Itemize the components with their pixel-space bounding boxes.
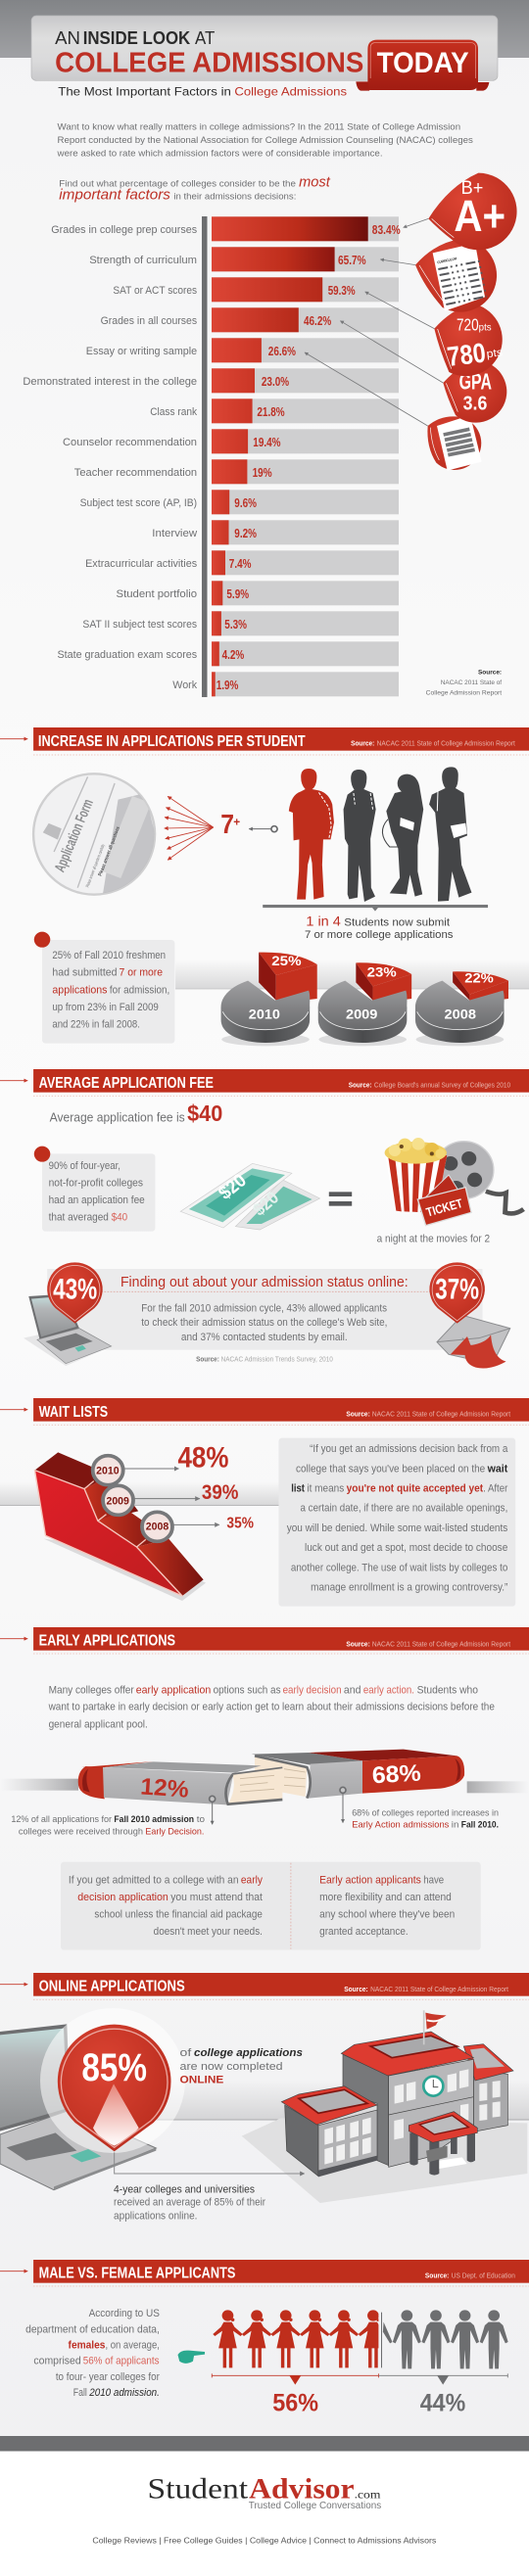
heading: online applications: Source: bbox=[344, 1985, 368, 1993]
intro text: early decision bbox=[283, 1684, 342, 1696]
chart lead-in: important factors bbox=[59, 188, 170, 204]
heading: male vs female applicants: US Dept. of Education bbox=[452, 2271, 515, 2279]
row: grades in college prep courses bbox=[51, 216, 401, 241]
quote box bbox=[278, 1438, 515, 1607]
icon: pointing hand bbox=[177, 2351, 205, 2364]
book: left, 12 percent bbox=[0, 1761, 282, 1824]
comparison box: you must attend that bbox=[170, 1892, 264, 1903]
row: essay or writing sample: Essay or writing sample bbox=[86, 346, 197, 357]
callout: ninety percent: 90% of four-year, bbox=[49, 1160, 120, 1172]
pie: 2010 bbox=[221, 953, 317, 1046]
badge: test scores: 780 bbox=[446, 337, 488, 372]
heading: wait lists bbox=[0, 1398, 529, 1425]
comparison box: doesn't meet your needs. bbox=[154, 1926, 263, 1938]
bracket: 44 percent bbox=[378, 2373, 507, 2416]
intro text bbox=[48, 1684, 495, 1730]
pie: 2009 bbox=[318, 962, 411, 1046]
row: demonstrated interest bbox=[23, 368, 399, 393]
row: extracurricular activities: Extracurricular activities bbox=[85, 558, 197, 570]
comparison box: school unless the financial aid package bbox=[94, 1909, 263, 1921]
intro paragraph: Want to know what really matters in college admissions? In the 2011 State of College Admission bbox=[58, 121, 460, 131]
banner: admission status online: For the fall 2010 admission cycle, 43% allowed applicants bbox=[141, 1302, 387, 1314]
chart lead-in: Find out what percentage of colleges consider to be the bbox=[59, 179, 296, 189]
row: essay or writing sample bbox=[86, 338, 399, 362]
text: online share bbox=[180, 2047, 304, 2085]
bracket bbox=[264, 905, 488, 911]
row: state graduation exam scores: State graduation exam scores bbox=[57, 649, 197, 661]
heading: average application fee: AVERAGE APPLICATION FEE bbox=[39, 1075, 214, 1092]
callout: freshmen: 7 or more bbox=[120, 967, 163, 979]
row: grades in all courses: 46.2% bbox=[304, 314, 331, 328]
callout: ninety percent: that averaged bbox=[49, 1212, 109, 1224]
description: comprised bbox=[33, 2356, 81, 2367]
footer links: College Reviews | Free College Guides | College Advice | Connect to Admissions Advisors bbox=[92, 2535, 436, 2545]
row: sat ii subject test scores bbox=[82, 611, 399, 635]
caption: early decision: colleges were received through bbox=[19, 1826, 143, 1836]
chart lead-in bbox=[59, 175, 331, 204]
row: work: 1.9% bbox=[216, 679, 238, 692]
marker: 2008: 35% bbox=[226, 1516, 254, 1531]
heading: male vs female applicants: MALE VS. FEMALE APPLICANTS bbox=[39, 2266, 235, 2281]
badges with arrows bbox=[305, 173, 517, 471]
title plate bbox=[31, 16, 498, 80]
pin: 43 percent: 43% bbox=[53, 1274, 97, 1306]
chart: declining slope bbox=[34, 1452, 206, 1601]
pin: 85 percent: 85% bbox=[81, 2046, 147, 2089]
fee statement: $40 bbox=[187, 1101, 222, 1126]
ribbon: today: TODAY bbox=[377, 47, 469, 79]
seven plus: + bbox=[233, 816, 240, 828]
subtitle: The Most Important Factors in bbox=[58, 85, 231, 99]
movies caption: a night at the movies for 2 bbox=[377, 1233, 490, 1244]
student: gray girl bbox=[382, 774, 423, 897]
icon: popcorn and film reel: TICKET bbox=[424, 1195, 464, 1220]
icon: twenty dollar bills: $20 bbox=[249, 1187, 282, 1220]
student: gray with books bbox=[429, 767, 471, 902]
heading: wait lists: Source: bbox=[346, 1409, 370, 1418]
seven plus: 7 bbox=[220, 809, 234, 839]
book: left, 12 percent: 12% bbox=[139, 1773, 190, 1803]
heading: early applications: Source: bbox=[346, 1639, 370, 1648]
icon: popcorn and film reel bbox=[385, 1138, 523, 1226]
student: red bbox=[289, 769, 334, 900]
caption: early action bbox=[352, 1807, 499, 1830]
callout: freshmen: applications bbox=[52, 984, 108, 996]
row: student portfolio bbox=[116, 581, 399, 605]
chart source note: NACAC 2011 State of bbox=[441, 679, 502, 686]
comparison box: have bbox=[423, 1874, 444, 1886]
subtitle bbox=[58, 85, 347, 99]
row: sat ii subject test scores: 5.3% bbox=[224, 618, 247, 632]
callout: ninety percent: had an application fee bbox=[49, 1194, 145, 1206]
text: four year colleges: 4-year colleges and universities bbox=[114, 2183, 255, 2195]
badge: test scores: pts bbox=[486, 347, 504, 360]
male figures bbox=[382, 2310, 508, 2368]
title line 1: AT bbox=[195, 28, 216, 49]
comparison box: decision application bbox=[77, 1892, 168, 1903]
students silhouettes bbox=[289, 767, 471, 902]
heading: average application fee bbox=[0, 1069, 529, 1096]
bar chart: admission factors bbox=[23, 216, 401, 697]
panel: application fee bbox=[24, 1101, 523, 1369]
description: Fall bbox=[73, 2387, 87, 2399]
badge: curriculum: CURRICULUM bbox=[437, 257, 457, 264]
logo: studentadvisor: .com bbox=[355, 2488, 381, 2502]
heading: wait lists: WAIT LISTS bbox=[39, 1404, 108, 1421]
pie: 2009: 2009 bbox=[346, 1007, 377, 1023]
callout: ninety percent: not-for-profit colleges bbox=[49, 1177, 144, 1189]
icon: application form magnifier: Please answer all questions bbox=[97, 825, 121, 877]
caption: early action: Fall 2010. bbox=[461, 1820, 499, 1830]
one in four caption bbox=[305, 914, 454, 941]
quote box: manage enrollment is a growing controversy.” bbox=[311, 1582, 508, 1594]
title line 1: AN bbox=[55, 28, 80, 49]
intro paragraph: Report conducted by the National Association for College Admission Counseling (NACAC) colleges bbox=[58, 135, 473, 145]
caption: early action: 68% of colleges reported increases in bbox=[352, 1807, 499, 1817]
heading: increase in applications per student: Source: bbox=[351, 738, 374, 747]
row: sat or act scores: SAT or ACT scores bbox=[113, 285, 197, 297]
arrows fanning to form bbox=[165, 796, 214, 860]
chart source note bbox=[426, 670, 502, 697]
heading: increase in applications per student bbox=[0, 727, 529, 755]
badge: transcript page bbox=[427, 415, 482, 471]
row: interview: 9.2% bbox=[234, 527, 257, 540]
text: online share: are now completed bbox=[180, 2061, 283, 2073]
text: online share: ONLINE bbox=[180, 2074, 224, 2085]
pie: 2009: 23% bbox=[367, 965, 397, 980]
row: work: Work bbox=[172, 679, 197, 691]
horizon shadow bbox=[0, 1481, 280, 1506]
row: extracurricular activities: 7.4% bbox=[229, 557, 251, 571]
row: counselor recommendation: Counselor recommendation bbox=[63, 437, 197, 448]
fee statement bbox=[50, 1101, 222, 1126]
row: strength of curriculum: 65.7% bbox=[338, 254, 366, 267]
text: online share: of bbox=[180, 2047, 192, 2059]
heading: early applications bbox=[0, 1627, 529, 1654]
panel: header bbox=[0, 0, 529, 204]
icon: laptop bbox=[0, 2008, 305, 2190]
callout: freshmen: and 22% in fall 2008. bbox=[52, 1018, 140, 1030]
row: strength of curriculum: Strength of curriculum bbox=[89, 255, 197, 266]
one in four caption: Students now submit bbox=[344, 917, 450, 929]
callout: ninety percent: $40 bbox=[112, 1212, 127, 1224]
student: gray with backpack bbox=[339, 770, 376, 902]
pie: 2010: 25% bbox=[271, 954, 302, 969]
pin: 43 percent bbox=[47, 1262, 103, 1324]
chart source note: Source: bbox=[478, 670, 502, 677]
row: grades in all courses: Grades in all courses bbox=[101, 315, 197, 327]
text: four year colleges: received an average of 85% of their bbox=[114, 2197, 265, 2209]
heading: early applications: EARLY APPLICATIONS bbox=[39, 1633, 175, 1649]
badge: curriculum bbox=[415, 239, 497, 312]
heading: online applications bbox=[0, 1973, 529, 1999]
description: females bbox=[69, 2340, 105, 2352]
heading: early applications: NACAC 2011 State of College Admission Report bbox=[372, 1639, 511, 1648]
badge: test scores: pts bbox=[479, 323, 492, 334]
bracket: 56 percent bbox=[212, 2373, 378, 2416]
fee statement: Average application fee is bbox=[50, 1110, 185, 1125]
pie: 2010: 2010 bbox=[249, 1007, 280, 1023]
caption: early decision: Fall 2010 admission bbox=[114, 1814, 194, 1824]
badge: test scores: 720 bbox=[457, 315, 479, 335]
pie: 2008 bbox=[415, 971, 508, 1046]
pin: 85 percent bbox=[58, 2025, 171, 2151]
row: essay or writing sample: 26.6% bbox=[268, 345, 296, 358]
pie: 2008: 22% bbox=[464, 971, 494, 986]
intro text: general applicant pool. bbox=[49, 1718, 148, 1730]
row: interview bbox=[152, 520, 399, 544]
icon: application form magnifier: Application Form bbox=[52, 797, 97, 874]
heading: wait lists: NACAC 2011 State of College Admission Report bbox=[372, 1409, 511, 1418]
chart source note: College Admission Report bbox=[426, 690, 502, 697]
marker: 2009: 39% bbox=[202, 1479, 238, 1504]
icon: application form magnifier bbox=[31, 773, 157, 896]
pin: 37 percent bbox=[429, 1262, 485, 1324]
intro text: and bbox=[344, 1684, 361, 1696]
heading: male vs female applicants: Source: bbox=[425, 2271, 449, 2279]
description: to four- year colleges for bbox=[56, 2371, 160, 2383]
badge: a plus: B+ bbox=[461, 178, 483, 199]
arrow from students bbox=[249, 826, 277, 832]
intro text: Many colleges offer bbox=[49, 1684, 134, 1696]
quote box: . After bbox=[483, 1482, 508, 1494]
panel: applications per student bbox=[33, 767, 529, 1046]
description: 2010 admission. bbox=[88, 2387, 160, 2399]
callout: freshmen: up from 23% in Fall 2009 bbox=[52, 1002, 159, 1013]
panel: early applications bbox=[0, 1684, 529, 1950]
icon: application form magnifier: Please answer all questions carefully bbox=[84, 843, 106, 888]
intro paragraph bbox=[56, 121, 473, 158]
row: grades in college prep courses: Grades in college prep courses bbox=[51, 224, 197, 236]
intro text: options such as bbox=[214, 1684, 281, 1696]
panel: male vs female bbox=[25, 2308, 508, 2416]
icon: envelope with arrow bbox=[437, 1315, 510, 1369]
panel: wait lists bbox=[0, 1438, 515, 1607]
row: student portfolio: Student portfolio bbox=[116, 588, 197, 600]
row: counselor recommendation bbox=[63, 429, 399, 453]
row: student portfolio: 5.9% bbox=[226, 587, 249, 601]
text: online share: college applications bbox=[194, 2047, 304, 2059]
banner: admission status online: to check their admission status on the college's Web site, bbox=[141, 1317, 387, 1329]
marker: 2010: 2010 bbox=[96, 1466, 120, 1477]
marker: 2008: 2008 bbox=[146, 1522, 168, 1533]
banner source: Source: bbox=[196, 1355, 219, 1363]
banner source: NACAC Admission Trends Survey, 2010 bbox=[221, 1355, 333, 1363]
row: counselor recommendation: 19.4% bbox=[253, 436, 280, 449]
female figures bbox=[213, 2310, 388, 2367]
title line 2: COLLEGE ADMISSIONS bbox=[55, 48, 363, 78]
comparison box: more flexibility and can attend bbox=[319, 1892, 452, 1903]
one in four caption: 7 or more college applications bbox=[305, 929, 454, 941]
row: class rank: Class rank bbox=[150, 406, 197, 418]
callout: freshmen: had submitted bbox=[52, 967, 118, 979]
marker: 2008 bbox=[142, 1512, 254, 1541]
text: four year colleges: applications online. bbox=[114, 2210, 197, 2222]
description: According to US bbox=[89, 2308, 160, 2319]
heading: increase in applications per student: INCREASE IN APPLICATIONS PER STUDENT bbox=[38, 733, 306, 750]
logo: studentadvisor: Trusted College Conversations bbox=[249, 2501, 381, 2511]
badge: gpa bbox=[443, 360, 506, 423]
quote box: luck out and get a spot, most decide to choose bbox=[305, 1542, 507, 1554]
quote box: you're not quite accepted yet bbox=[347, 1482, 483, 1494]
text: four year colleges bbox=[114, 2183, 265, 2222]
quote box: wait bbox=[487, 1463, 508, 1475]
row: grades in all courses bbox=[101, 307, 399, 332]
row: state graduation exam scores: 4.2% bbox=[222, 648, 244, 662]
heading: average application fee: Source: bbox=[349, 1080, 372, 1089]
row: extracurricular activities bbox=[85, 550, 399, 575]
row: strength of curriculum bbox=[89, 247, 399, 271]
description: department of education data, bbox=[25, 2323, 160, 2335]
callout: freshmen: for admission, bbox=[110, 984, 169, 996]
chart lead-in: in their admissions decisions: bbox=[173, 192, 296, 202]
heading: average application fee: College Board's annual Survey of Colleges 2010 bbox=[374, 1080, 510, 1089]
callout: ninety percent bbox=[34, 1147, 155, 1232]
comparison box: If you get admitted to a college with an bbox=[69, 1874, 238, 1886]
icon: books bbox=[0, 1750, 529, 1824]
caption: early decision: Early Decision. bbox=[145, 1826, 204, 1836]
row: subject test score bbox=[80, 490, 399, 514]
row: sat or act scores bbox=[113, 277, 399, 302]
badge: a plus: A+ bbox=[454, 191, 505, 241]
caption: early decision: to bbox=[197, 1814, 205, 1824]
arrows to bars bbox=[305, 218, 443, 426]
intro text: Students who bbox=[417, 1684, 478, 1696]
icon: twenty dollar bills: $20 bbox=[215, 1170, 251, 1204]
quote box: list bbox=[291, 1482, 305, 1494]
chart lead-in: most bbox=[299, 175, 331, 191]
comparison box: Early action applicants bbox=[319, 1874, 421, 1886]
icon: twenty dollar bills bbox=[180, 1163, 319, 1230]
icon: school building bbox=[242, 2010, 527, 2203]
ribbon: today bbox=[356, 40, 489, 91]
row: class rank bbox=[150, 398, 399, 423]
intro text: early action. bbox=[363, 1684, 414, 1696]
row: teacher recommendation: Teacher recommendation bbox=[74, 467, 197, 479]
book: right, 68 percent: 68% bbox=[371, 1760, 421, 1789]
quote box: it means bbox=[307, 1482, 345, 1494]
row: subject test score: Subject test score (AP, IB) bbox=[80, 497, 197, 509]
bracket: 44 percent: 44% bbox=[420, 2390, 465, 2416]
callout: freshmen bbox=[34, 932, 174, 1044]
callout: freshmen: 25% of Fall 2010 freshmen bbox=[52, 950, 166, 961]
row: class rank: 21.8% bbox=[257, 405, 285, 419]
heading: male vs female applicants bbox=[0, 2260, 529, 2286]
caption: early decision: 12% of all applications for bbox=[11, 1814, 112, 1824]
row: teacher recommendation bbox=[74, 459, 399, 484]
banner: admission status online bbox=[47, 1269, 482, 1350]
panel: online applications bbox=[0, 2008, 529, 2222]
footer bbox=[0, 2436, 529, 2576]
badge: test scores bbox=[434, 304, 505, 376]
pie: 2008: 2008 bbox=[445, 1007, 476, 1023]
one in four caption: 1 in 4 bbox=[306, 914, 341, 930]
logo: studentadvisor: Advisor bbox=[249, 2472, 355, 2506]
badge: gpa: GPA bbox=[459, 368, 492, 394]
row: sat or act scores: 59.3% bbox=[328, 284, 356, 298]
icon: laptop bbox=[24, 1294, 112, 1366]
banner: admission status online: Finding out about your admission status online: bbox=[120, 1275, 409, 1290]
row: teacher recommendation: 19% bbox=[253, 466, 272, 480]
marker: 2010 bbox=[93, 1442, 228, 1485]
caption: early decision bbox=[11, 1814, 205, 1836]
horizon shadow bbox=[175, 960, 529, 989]
intro text: early application bbox=[136, 1684, 211, 1696]
description bbox=[25, 2308, 160, 2399]
comparison box bbox=[61, 1862, 481, 1950]
book: right, 68 percent bbox=[252, 1750, 529, 1823]
horizon shadow bbox=[0, 2081, 529, 2121]
caption: early action: in bbox=[452, 1820, 458, 1830]
comparison box: any school where they've been bbox=[319, 1909, 455, 1921]
description: , on average, bbox=[105, 2340, 160, 2352]
banner: admission status online: and 37% contacted students by email. bbox=[181, 1332, 348, 1343]
subtitle: College Admissions bbox=[234, 85, 347, 99]
heading: online applications: NACAC 2011 State of College Admission Report bbox=[370, 1985, 509, 1993]
row: demonstrated interest: Demonstrated interest in the college bbox=[23, 376, 197, 388]
marker: 2009: 2009 bbox=[106, 1496, 129, 1508]
description: 56% of applicants bbox=[83, 2356, 160, 2367]
logo: studentadvisor bbox=[147, 2472, 381, 2511]
row: subject test score: 9.6% bbox=[234, 496, 257, 510]
marker: 2009 bbox=[103, 1479, 238, 1515]
heading: online applications: ONLINE APPLICATIONS bbox=[39, 1979, 185, 1994]
pin: 37 percent: 37% bbox=[435, 1274, 479, 1306]
marker: 2010: 48% bbox=[177, 1442, 228, 1475]
caption: early action: Early Action admissions bbox=[352, 1820, 450, 1830]
comparison box: early bbox=[241, 1874, 263, 1886]
badge: a plus bbox=[428, 173, 517, 250]
title line 1: INSIDE LOOK bbox=[83, 28, 190, 49]
people row bbox=[213, 2310, 508, 2368]
logo: studentadvisor: Student bbox=[147, 2472, 249, 2506]
row: state graduation exam scores bbox=[57, 641, 399, 666]
row: demonstrated interest: 23.0% bbox=[262, 375, 289, 389]
quote box: college that says you've been placed on the bbox=[296, 1463, 485, 1475]
badge: gpa: 3.6 bbox=[463, 392, 487, 414]
bracket: 56 percent: 56% bbox=[272, 2390, 318, 2416]
row: work bbox=[172, 672, 399, 696]
row: interview: Interview bbox=[152, 528, 198, 539]
comparison box: granted acceptance. bbox=[319, 1926, 409, 1938]
row: grades in college prep courses: 83.4% bbox=[372, 223, 401, 237]
row: sat ii subject test scores: SAT II subject test scores bbox=[82, 619, 197, 631]
equals sign bbox=[329, 1192, 352, 1206]
intro paragraph: were asked to rate which admission factors were of considerable importance. bbox=[56, 148, 383, 158]
